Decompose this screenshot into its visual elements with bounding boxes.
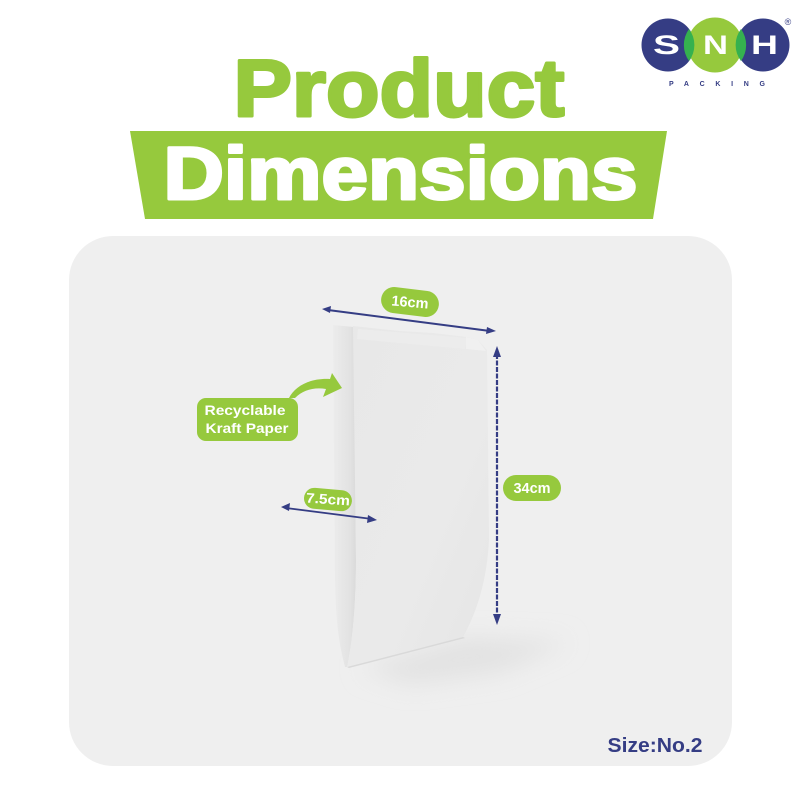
logo: SNH Packing: N [703, 30, 728, 60]
dimension arrow: depth 7.5cm [281, 503, 377, 523]
logo: SNH Packing: H [751, 30, 778, 60]
dimension arrow: height 34cm [493, 346, 501, 625]
logo: SNH Packing [642, 17, 792, 88]
label: 16cm: 16cm [391, 293, 429, 313]
size label: Size:No.2 [608, 735, 702, 757]
bag shadow [360, 638, 570, 684]
label: 16cm [380, 286, 440, 318]
callout: Recyclable Kraft Paper [197, 398, 298, 441]
logo: SNH Packing: PACKING [669, 81, 766, 88]
panel: product background [69, 236, 732, 766]
title: Product: Product [234, 44, 564, 134]
dimension arrow: width 16cm [322, 306, 496, 334]
logo: SNH Packing: S [653, 30, 680, 60]
heading banner: Dimensions: Dimensions [164, 132, 638, 215]
callout: Recyclable Kraft Paper: Recyclable [204, 402, 286, 418]
label: 34cm [503, 475, 561, 501]
logo: SNH Packing: ® [785, 17, 792, 27]
icon: curved arrow to bag [289, 373, 342, 398]
callout: Recyclable Kraft Paper: Kraft Paper [206, 420, 289, 436]
label: 34cm: 34cm [513, 481, 551, 497]
label: 7.5cm: 7.5cm [305, 489, 351, 509]
product image: paper bag [333, 325, 489, 668]
label: 7.5cm [303, 487, 353, 512]
